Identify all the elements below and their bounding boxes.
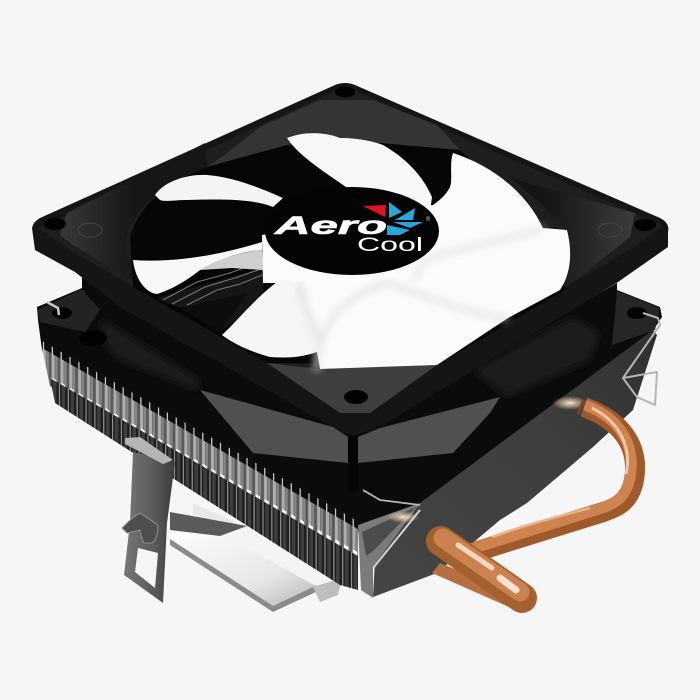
frame corner: bottom: [267, 363, 437, 413]
aluminium end plate: [373, 330, 657, 597]
logo: emblem: [363, 202, 423, 235]
frame corner: top: [207, 100, 460, 167]
grey band: left: [200, 390, 348, 463]
mounting strap: [170, 512, 247, 536]
housing shaded panel: right: [473, 317, 600, 397]
frame corner: left: [60, 143, 207, 285]
left plate surface: [37, 289, 100, 332]
fan opening: [130, 143, 565, 365]
silver end bracket: [358, 503, 420, 598]
screw boss: right: [598, 223, 622, 237]
hole: top: [335, 86, 355, 98]
pipe: upper curve: [462, 400, 635, 556]
hole: left: [44, 218, 66, 230]
mounting bracket: [122, 437, 175, 603]
corner post: left: [79, 330, 107, 346]
wire clip: left: [47, 302, 59, 315]
frame silhouette: [32, 83, 668, 436]
frame corner: right: [510, 177, 635, 287]
hub shadow: [300, 285, 320, 340]
screw boss: left: [78, 223, 102, 237]
grey band: right: [358, 397, 500, 463]
wire clip: centre: [363, 490, 420, 505]
logo: registered mark: ®: [426, 216, 431, 223]
hub disc: [265, 187, 439, 275]
heatsink block and fan housing: [37, 277, 662, 532]
left plate hole: [52, 307, 72, 319]
housing shaded panel: left: [100, 318, 200, 390]
hub logo: [265, 187, 439, 275]
heatsink fins: [42, 340, 358, 590]
right plate surface: [612, 291, 660, 345]
blade: top: [287, 133, 432, 212]
right plate hole: [627, 307, 647, 319]
wire clip: right: [623, 313, 660, 405]
corner post: centre: [348, 430, 358, 492]
logo: Aero wordmark: Aero: [273, 212, 387, 240]
logo: Cool wordmark: Cool: [357, 235, 423, 256]
blade shadow shape: [180, 293, 247, 332]
blade: left underside: [200, 250, 263, 270]
hole: right: [634, 219, 656, 231]
blade: lower left: [222, 280, 320, 357]
pipe: lower behind: [432, 563, 520, 612]
blade: left: [133, 242, 262, 294]
fan frame: [32, 83, 668, 436]
hole: bottom: [344, 390, 368, 404]
fins visible through fan: [157, 262, 263, 332]
blade: right edge: [415, 228, 543, 280]
blade: upper left: [155, 175, 283, 207]
copper heat pipes: [432, 396, 635, 612]
pipe: front: [441, 538, 522, 598]
hub and blade body: [262, 153, 570, 369]
glow at pipe end: [552, 396, 588, 410]
fan blades: [133, 133, 570, 370]
blade: lower right edge: [317, 283, 508, 370]
mounting base plate: [170, 503, 342, 612]
frame top face: [38, 86, 664, 413]
